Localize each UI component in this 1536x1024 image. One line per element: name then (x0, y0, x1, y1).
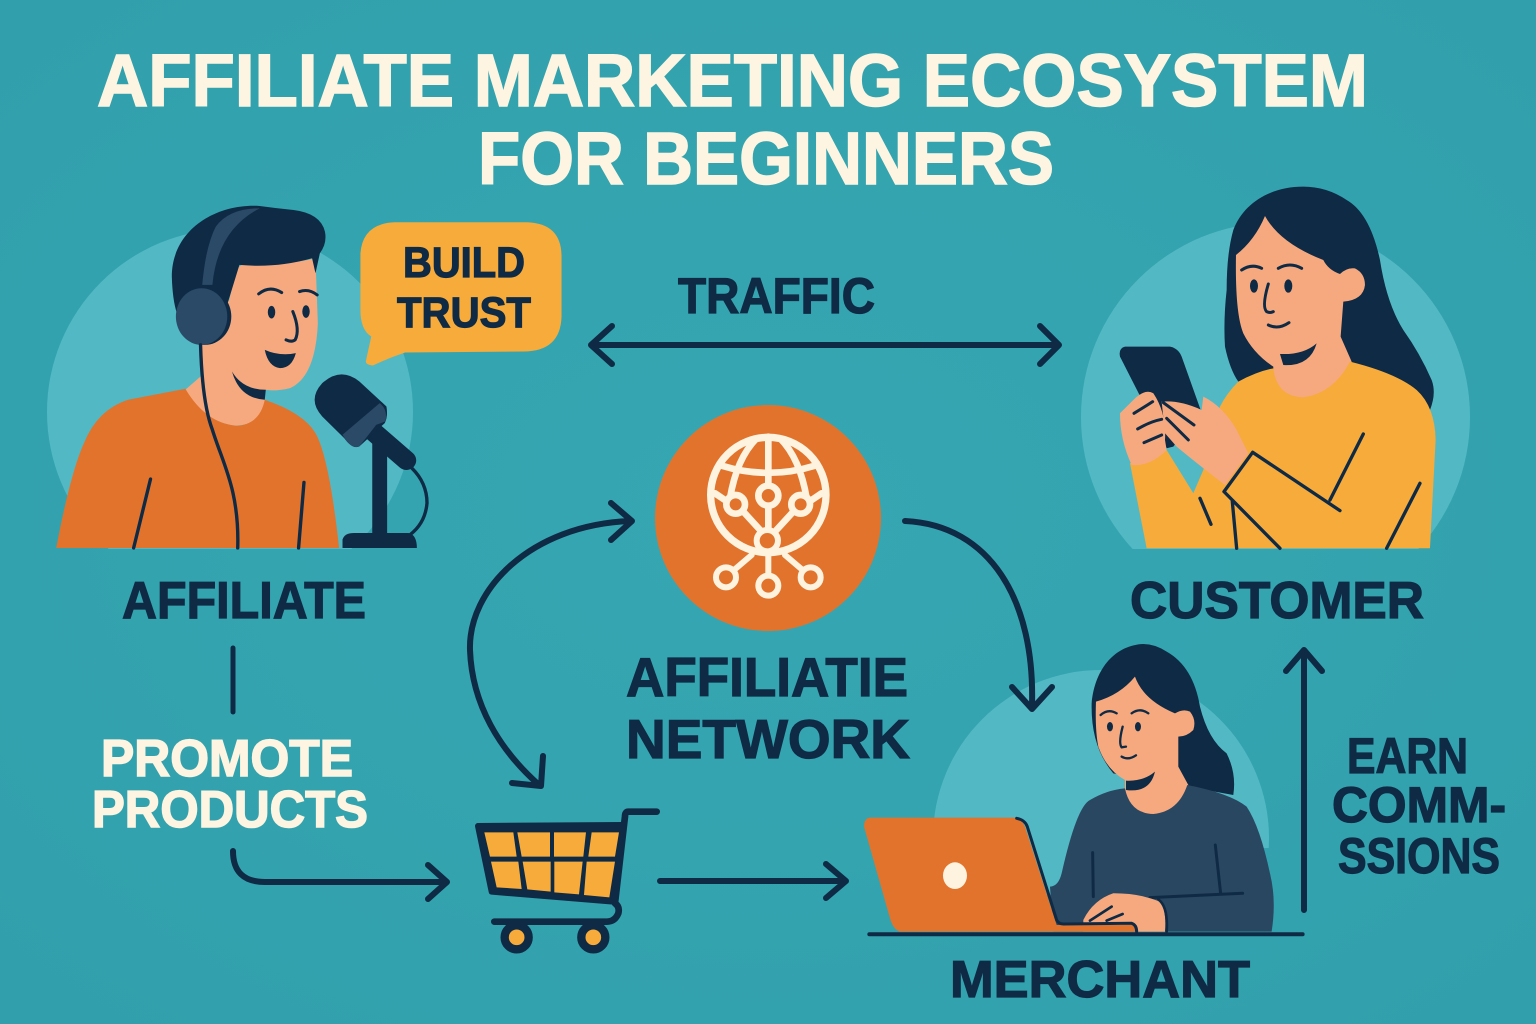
label: earn commissions: EARN (1347, 728, 1468, 784)
title: FOR BEGINNERS (478, 117, 1054, 200)
icon: laptop (864, 818, 1303, 934)
arrow: cart to merchant (660, 864, 846, 898)
title: AFFILIATE MARKETING ECOSYSTEM (97, 39, 1368, 122)
label: earn commissions (1332, 728, 1506, 884)
arrow: network to merchant curved (905, 521, 1052, 709)
customer figure (1120, 187, 1436, 548)
label: promote products (92, 730, 368, 839)
title (97, 39, 1368, 200)
label: traffic: TRAFFIC (678, 268, 875, 324)
callout: build trust speech bubble: TRUST (397, 289, 531, 337)
heading: affiliate label: AFFILIATE (122, 572, 366, 630)
customer background circle (1081, 227, 1470, 549)
icon: microphone (315, 374, 427, 548)
panel: affiliate illustration (47, 206, 429, 550)
icon: affiliate network globe (655, 405, 881, 631)
heading: merchant label: MERCHANT (950, 951, 1250, 1009)
heading: affiliate network label: AFFILIATIE (626, 646, 908, 708)
arrow: merchant to customer (1286, 650, 1322, 910)
label: earn commissions: COMM- (1332, 777, 1506, 833)
label: promote products: PROMOTE (101, 730, 353, 788)
heading: customer label: CUSTOMER (1130, 572, 1424, 630)
panel: merchant illustration (864, 644, 1305, 936)
arrow: traffic two-way (591, 326, 1059, 364)
callout: build trust speech bubble (360, 222, 562, 365)
affiliate figure (56, 206, 339, 548)
callout: build trust speech bubble: BUILD (403, 239, 525, 287)
divider arrow: affiliate to promote (230, 648, 236, 712)
icon: shopping cart (478, 812, 657, 949)
panel: customer illustration (1081, 186, 1470, 550)
merchant background circle (934, 670, 1269, 895)
arrow: promote to cart (233, 851, 447, 899)
heading: affiliate network label: NETWORK (626, 708, 910, 770)
label: earn commissions: SSIONS (1338, 828, 1500, 884)
affiliate background circle (47, 234, 413, 549)
heading: affiliate network label (626, 646, 910, 770)
merchant figure (1050, 644, 1274, 932)
label: promote products: PRODUCTS (92, 781, 368, 839)
arrow: network to cart curved two-way (470, 503, 632, 786)
